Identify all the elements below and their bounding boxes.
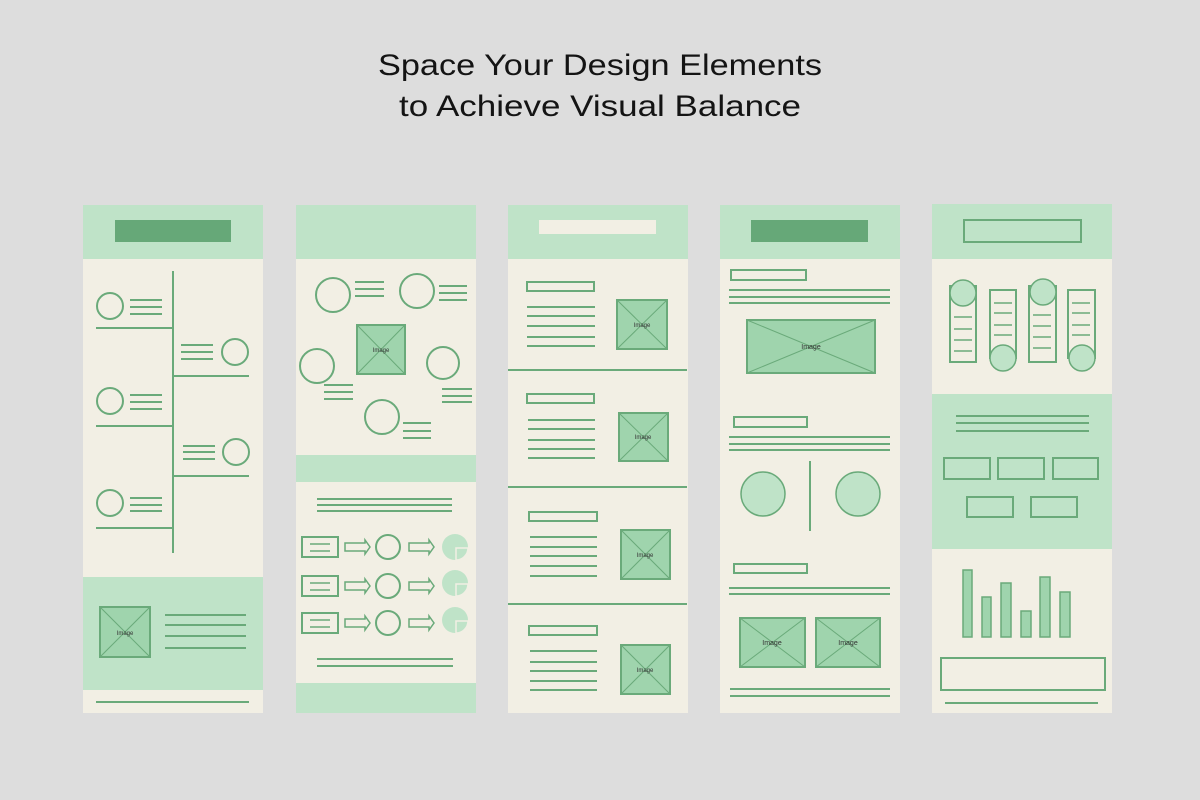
bar chart [963,570,1070,637]
panel: stacked sections layout: Image [637,553,654,559]
title: Space Your Design Elements [378,49,822,82]
title: to Achieve Visual Balance [399,90,801,123]
panel: radial layout [296,205,476,713]
panel: article layout: Image [801,344,821,351]
panel: stacked sections layout: Image [635,435,652,441]
panel: radial layout: Image [373,348,390,354]
panel: article layout: Image [838,640,858,647]
panel: article layout [720,205,900,713]
panel: stacked sections layout: Image [637,668,654,674]
panel: data layout [932,204,1112,713]
title [378,49,822,123]
panel: timeline layout: Image [117,631,134,637]
panel: stacked sections layout [508,205,688,713]
panel: stacked sections layout: Image [634,323,651,329]
panel: timeline layout [83,205,263,713]
panel: article layout: Image [762,640,782,647]
